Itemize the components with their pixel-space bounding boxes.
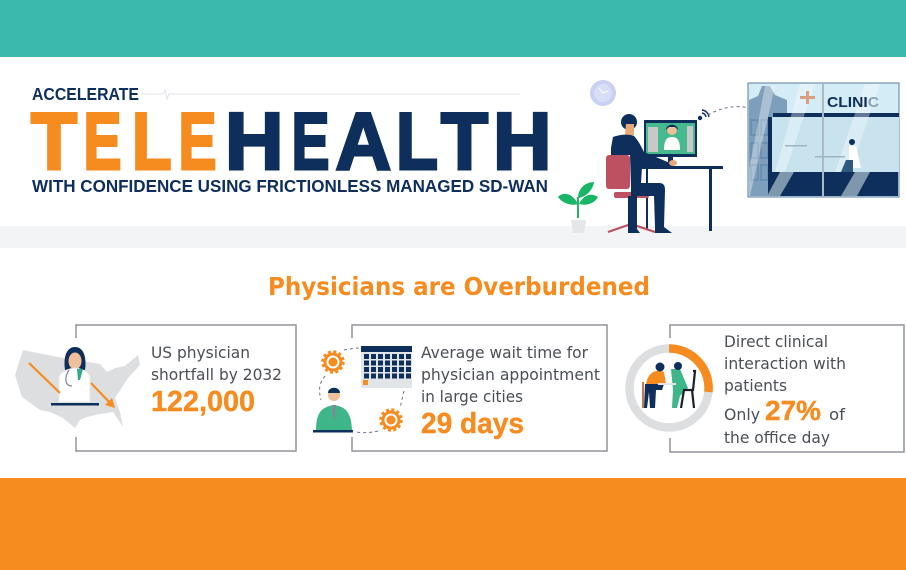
panel frame <box>76 325 296 451</box>
title: telehealth: T <box>441 97 488 187</box>
title: telehealth: E <box>178 97 216 187</box>
heading: Physicians are Overburdened <box>268 272 650 301</box>
panel: clinical interaction <box>630 325 904 452</box>
title: telehealth: T <box>31 97 77 187</box>
top teal band <box>0 0 906 57</box>
stat: 29 days: 29 days <box>421 408 524 440</box>
stat: only 27%: 27% <box>765 395 821 426</box>
title: telehealth: E <box>292 97 330 187</box>
chair <box>606 155 655 232</box>
dashed connection <box>708 107 815 133</box>
illustration: telehealth visit <box>558 80 899 233</box>
panel frame <box>352 325 607 451</box>
icon: heartbeat line <box>141 90 520 99</box>
text: clinical label: patients <box>724 376 787 395</box>
text: wait time label: Average wait time for <box>421 343 588 362</box>
icon: wifi signal <box>698 110 709 120</box>
title: telehealth: A <box>336 97 391 187</box>
icon: wall clock <box>590 80 616 106</box>
title: telehealth: L <box>132 97 172 187</box>
grey floor band <box>0 226 906 248</box>
title: telehealth: H <box>493 97 552 187</box>
title block <box>31 84 552 196</box>
text: shortfall label: US physician <box>151 343 250 362</box>
panel: physician shortfall <box>15 325 296 451</box>
icon: doctor and patient <box>642 362 695 408</box>
title: telehealth: L <box>396 97 438 187</box>
icon: calendar and doctor <box>313 346 412 433</box>
desk <box>640 166 723 231</box>
eyebrow: accelerate: ACCELERATE <box>32 84 139 104</box>
icon: US map with doctor <box>15 347 140 428</box>
clinic sign: CLINIC <box>827 94 879 111</box>
title: telehealth: H <box>225 97 284 187</box>
panel frame <box>670 325 904 452</box>
stat: only 27%: Only <box>724 405 760 424</box>
bottom orange band <box>0 478 906 570</box>
text: office day: the office day <box>724 428 830 447</box>
stat: 122,000: 122,000 <box>151 386 255 418</box>
text: clinical label: Direct clinical <box>724 332 828 351</box>
title: telehealth: E <box>84 97 122 187</box>
chart: 27% ring <box>630 348 709 428</box>
monitor with doctor <box>644 120 697 166</box>
stat: only 27%: of <box>829 405 845 424</box>
icon: plant <box>558 182 598 233</box>
seated man <box>611 114 677 233</box>
text: wait time label: in large cities <box>421 387 523 406</box>
clinic window <box>748 83 899 197</box>
text: wait time label: physician appointment <box>421 365 600 384</box>
panel: wait time <box>313 325 607 451</box>
text: clinical label: interaction with <box>724 354 846 373</box>
text: shortfall label: shortfall by 2032 <box>151 365 282 384</box>
subtitle: WITH CONFIDENCE USING FRICTIONLESS MANAGED SD-WAN <box>32 176 548 196</box>
seated clinician <box>785 139 861 172</box>
